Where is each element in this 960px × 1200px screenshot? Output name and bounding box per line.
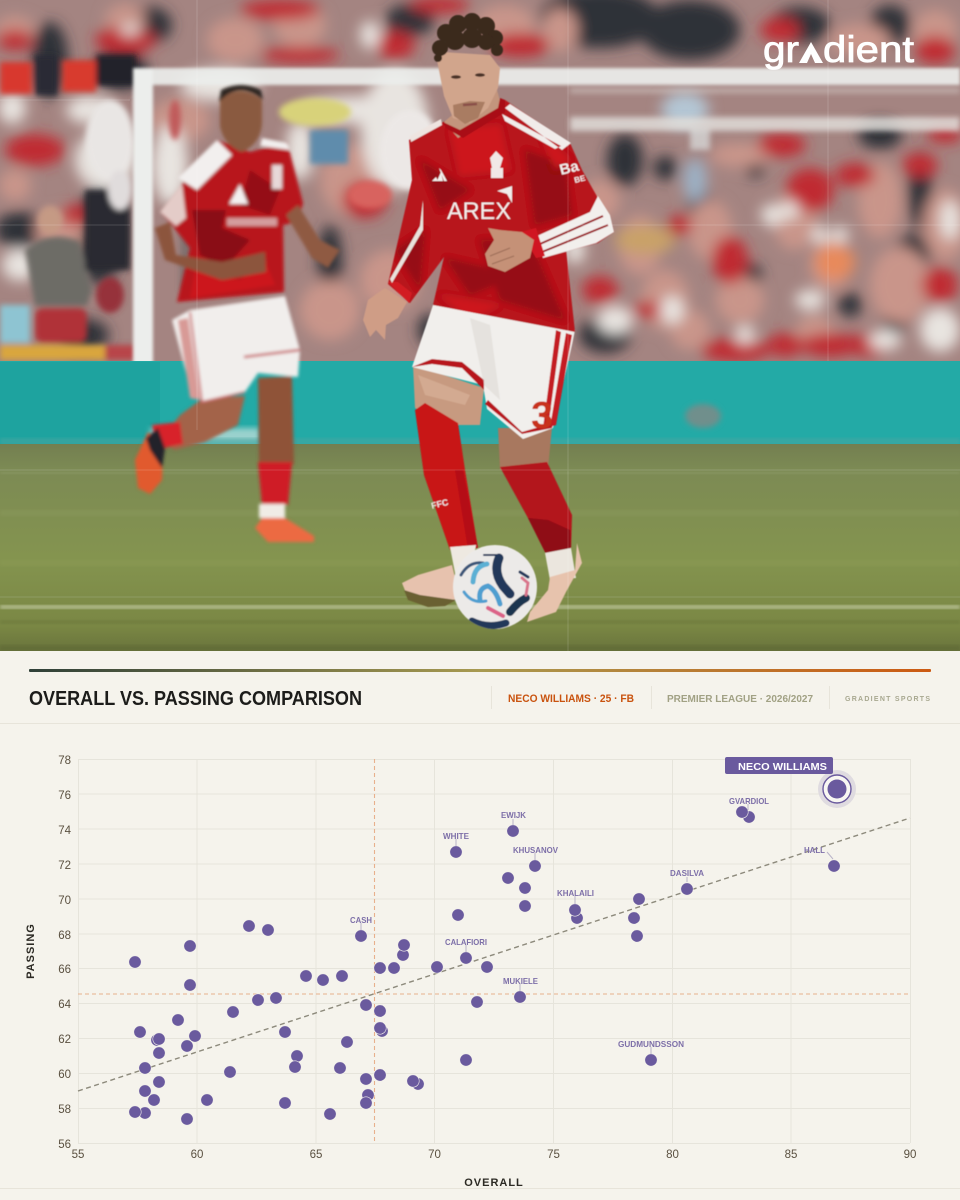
- back leg: [498, 428, 552, 470]
- face: [437, 52, 500, 123]
- collar and neck: [444, 90, 503, 138]
- label: Mukiele: MUKIELE: [503, 976, 538, 986]
- x axis tick labels: 90: [904, 1149, 916, 1161]
- right shoulder stripes: [502, 104, 571, 150]
- y axis tick labels: 68: [58, 930, 71, 942]
- y axis tick labels: 66: [58, 964, 71, 976]
- goal frame: [130, 66, 960, 361]
- label: Khalaili: KHALAILI: [557, 888, 594, 898]
- y axis tick labels: 60: [58, 1069, 71, 1081]
- front boot: [402, 564, 456, 600]
- faint grid overlay lines: [0, 0, 960, 651]
- shirt number: 3: [531, 395, 553, 437]
- y axis tick labels: 62: [58, 1034, 71, 1046]
- grass pitch: [0, 444, 960, 651]
- front leg and boot: [258, 376, 294, 465]
- label: Gvardiol: GVARDIOL: [729, 796, 769, 806]
- arms: [155, 222, 266, 280]
- hand: [485, 228, 534, 272]
- header meta: competition: PREMIER LEAGUE · 2026/2027: [667, 694, 813, 705]
- header meta: source: GRADIENT SPORTS: [845, 696, 930, 703]
- left shoulder stripes: [410, 119, 442, 142]
- x axis tick labels: 60: [191, 1149, 203, 1161]
- sleeve sponsor: Ba: [558, 158, 581, 179]
- player labels: [350, 796, 825, 1049]
- stadium crowd background: [0, 0, 960, 361]
- sleeve white stripes: [537, 196, 614, 258]
- x axis tick labels: [72, 1149, 916, 1161]
- main player: Neco Williams: BE: [573, 173, 587, 185]
- trend line: [78, 818, 910, 1091]
- scatter points: [129, 806, 840, 1125]
- label: Hall: HALL: [804, 845, 825, 855]
- y axis tick labels: 64: [58, 999, 72, 1011]
- sponsor text: AREX: [447, 198, 511, 225]
- logo: gradient: [763, 29, 915, 70]
- label: Gudmundsson: GUDMUNDSSON: [618, 1039, 684, 1049]
- label: Dasilva: DASILVA: [670, 868, 704, 878]
- label: Calafiori: CALAFIORI: [445, 937, 487, 947]
- main player: Neco Williams: [363, 13, 620, 629]
- jersey: [160, 140, 303, 302]
- back boot: [527, 543, 582, 622]
- y axis title: PASSING: [25, 923, 37, 979]
- front thigh: [413, 365, 484, 425]
- y axis tick labels: 76: [58, 790, 71, 802]
- ball: [453, 545, 537, 629]
- x axis title: OVERALL: [464, 1177, 524, 1189]
- callout: Neco Williams: NECO WILLIAMS: [738, 761, 827, 773]
- x axis tick labels: 85: [785, 1149, 797, 1161]
- left sleeve trim: [388, 282, 412, 303]
- y axis tick labels: 58: [58, 1104, 71, 1116]
- left stand seated fans and seats: [0, 55, 960, 360]
- title: OVERALL VS. PASSING COMPARISON: [29, 688, 362, 710]
- head: [220, 91, 262, 152]
- teal advertising board: [0, 361, 960, 445]
- highlighted point: Neco Williams: [818, 770, 856, 808]
- logo: gradient: gr: [763, 29, 799, 70]
- adidas mark: [432, 168, 447, 181]
- front sock: [415, 403, 478, 550]
- x axis tick labels: 70: [428, 1149, 441, 1161]
- y axis tick labels: 74: [58, 825, 72, 837]
- leader lines: [361, 804, 833, 1054]
- scatter chart: overall vs passing: [25, 755, 916, 1189]
- y axis tick labels: 56: [58, 1139, 71, 1151]
- median reference lines: [78, 759, 910, 1143]
- x axis tick labels: 80: [666, 1149, 679, 1161]
- accent gradient rule: [29, 669, 931, 672]
- logo: gradient: dient: [823, 29, 915, 70]
- y axis tick labels: [58, 755, 72, 1151]
- sponsor chevron: [497, 186, 512, 203]
- label: Cash: CASH: [350, 915, 372, 925]
- label: Khusanov: KHUSANOV: [513, 845, 558, 855]
- label: Ewijk: EWIJK: [501, 810, 527, 820]
- header meta: player: NECO WILLIAMS · 25 · FB: [508, 693, 634, 705]
- hair: [432, 13, 503, 62]
- label: White: WHITE: [443, 831, 469, 841]
- jersey and sleeves: [388, 100, 611, 332]
- crest: [490, 151, 503, 178]
- y axis tick labels: 78: [58, 755, 71, 767]
- left hand: [363, 288, 407, 340]
- sock logo: FFC: [430, 497, 450, 511]
- x axis tick labels: 75: [547, 1149, 560, 1161]
- y axis tick labels: 72: [58, 860, 71, 872]
- x axis tick labels: 55: [72, 1149, 84, 1161]
- background player: [135, 85, 340, 542]
- rear leg and boot: [160, 396, 245, 450]
- shorts: [172, 296, 300, 402]
- callout: Neco Williams: [725, 757, 833, 774]
- shorts: [412, 305, 575, 439]
- y axis tick labels: 70: [58, 895, 71, 907]
- photo: footballer in action: [0, 0, 960, 651]
- x axis tick labels: 65: [310, 1149, 322, 1161]
- front ankle sock: [450, 545, 476, 578]
